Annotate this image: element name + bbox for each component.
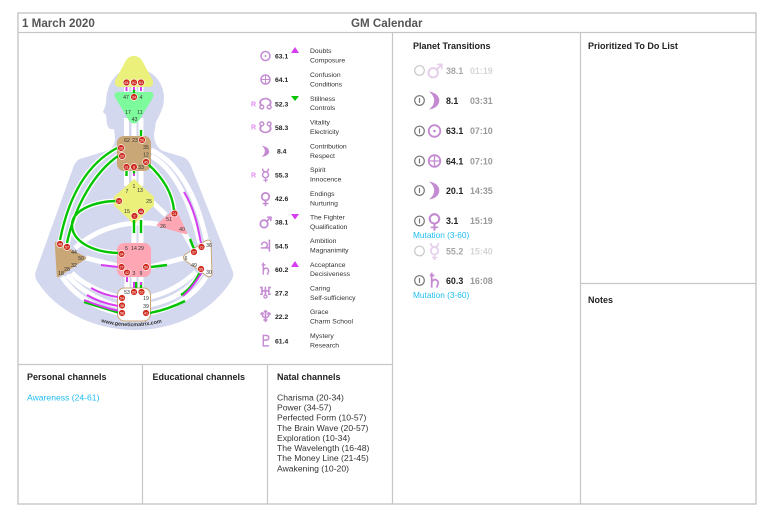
active magenta channels — [84, 87, 202, 310]
natal channels panel: The Money Line (21-45) — [277, 453, 369, 463]
url arc guide — [101, 321, 167, 326]
personal channels panel — [27, 372, 107, 402]
gate numbers: 19 — [143, 296, 149, 302]
row 22.2: 22.2 — [275, 314, 288, 321]
transition 8.1 — [415, 92, 493, 109]
planet activations list — [251, 47, 356, 350]
gate numbers: 30 — [206, 270, 212, 276]
active gate numbers: 10 — [117, 199, 121, 203]
row 27.2: ♅ — [258, 284, 273, 302]
transition 38.1: ♂ — [426, 59, 444, 83]
row 27.2 — [258, 284, 356, 302]
row 55.3: Innocence — [310, 176, 342, 184]
row 52.3: ☊ — [258, 94, 273, 114]
transition 55.2: ☿ — [428, 239, 441, 263]
white channels — [60, 87, 207, 313]
transition 63.1: 63.1 — [446, 126, 463, 136]
transition 60.3 — [413, 268, 493, 300]
natal channels panel: Awakening (10-20) — [277, 464, 349, 474]
gate numbers: 3 — [133, 271, 136, 277]
row 22.2: Charm School — [310, 318, 354, 326]
row 8.4: Contribution — [310, 144, 347, 150]
row 61.4: ♇ — [259, 332, 273, 350]
active gate numbers: 41 — [144, 311, 148, 315]
row 38.1: Qualification — [310, 224, 348, 231]
spleen center — [56, 243, 85, 276]
gate numbers: 17 — [125, 110, 131, 116]
gate numbers: 62 — [124, 138, 130, 144]
gate numbers: 49 — [191, 263, 197, 269]
active gate numbers: 58 — [120, 311, 124, 315]
row 8.4: Respect — [310, 153, 335, 160]
transition 38.1: 01:19 — [470, 66, 493, 76]
row 63.1: 63.1 — [275, 54, 288, 60]
transition 64.1 — [415, 155, 493, 167]
active gate numbers: 54 — [120, 296, 124, 300]
gate numbers: 26 — [160, 224, 166, 230]
gate numbers: 43 — [132, 117, 137, 123]
transition 3.1: 15:19 — [470, 216, 493, 226]
website url: www.geneticmatrix.com — [102, 319, 162, 326]
throat center — [117, 136, 151, 171]
gate numbers: 18 — [58, 271, 64, 277]
natal channels panel: Power (34-57) — [277, 402, 332, 412]
gate numbers: 9 — [140, 271, 143, 277]
planet transitions panel — [413, 41, 493, 300]
row 58.3 — [251, 118, 340, 137]
row 38.1 — [258, 213, 348, 232]
active gate numbers: 59 — [144, 265, 148, 269]
row 27.2: 27.2 — [275, 290, 288, 298]
active gate numbers: 24 — [132, 95, 136, 99]
active gate numbers: 42 — [125, 271, 129, 275]
gate numbers: 5 — [125, 246, 128, 252]
natal channels panel: The Wavelength (16-48) — [277, 443, 369, 453]
natal channels panel: The Brain Wave (20-57) — [277, 423, 369, 433]
solar plexus center — [183, 240, 212, 277]
row 54.5: Ambition — [310, 238, 337, 245]
active gate numbers: 45 — [144, 160, 148, 164]
natal channels panel: Exploration (10-34) — [277, 433, 350, 443]
body graph chart — [35, 56, 234, 330]
header: 1 March 2020 — [22, 17, 95, 30]
gate numbers: 4 — [140, 95, 143, 101]
row 60.2 — [258, 260, 351, 278]
transition 20.1 — [415, 182, 493, 199]
transition 3.1 — [413, 209, 493, 240]
transition 64.1: 07:10 — [470, 156, 493, 166]
row 63.1: Composure — [310, 58, 345, 64]
active gate numbers: 27 — [120, 265, 124, 269]
row 27.2: Caring — [310, 286, 330, 292]
to do heading: Prioritized To Do List — [588, 41, 678, 51]
transition 55.2: 15:40 — [470, 246, 493, 256]
row 60.2: Acceptance — [310, 262, 346, 269]
educational channels panel: Educational channels — [152, 372, 245, 382]
row 42.6: 42.6 — [275, 196, 288, 203]
silhouette — [35, 68, 233, 330]
row 64.1 — [261, 72, 343, 88]
row 58.3: 58.3 — [275, 125, 288, 132]
personal channels panel: Personal channels — [27, 372, 107, 382]
transition 38.1: 38.1 — [446, 66, 463, 76]
g center — [115, 180, 153, 223]
transitions heading: Planet Transitions — [413, 41, 491, 51]
notes heading: Notes — [588, 295, 613, 305]
active gate numbers: 37 — [192, 250, 196, 254]
row 61.4: Mystery — [310, 333, 334, 340]
row 38.1: ♂ — [258, 213, 273, 232]
active gate numbers: 52 — [140, 290, 144, 294]
row 52.3 — [251, 94, 336, 114]
transition 8.1: 8.1 — [446, 96, 458, 106]
gate numbers: 1 — [133, 184, 136, 190]
gate numbers — [58, 95, 212, 310]
row 38.1: 38.1 — [275, 220, 288, 226]
gate numbers: 11 — [137, 110, 143, 116]
header: GM Calendar — [351, 17, 423, 30]
active gate numbers: 61 — [132, 81, 136, 85]
row 52.3: Stillness — [310, 96, 336, 103]
gate numbers: 39 — [143, 304, 149, 310]
transition 55.2 — [415, 239, 493, 263]
header — [22, 17, 423, 30]
transition 60.3: 60.3 — [446, 276, 463, 286]
active gate numbers: 60 — [132, 290, 136, 294]
transition 3.1: 3.1 — [446, 216, 458, 226]
row 42.6: Nurturing — [310, 200, 338, 208]
row 58.3: ☋ — [258, 118, 273, 137]
transition 20.1: 20.1 — [446, 186, 463, 196]
gate numbers: 51 — [166, 217, 172, 223]
row 54.5: Magnanimity — [310, 248, 349, 254]
gate numbers: 6 — [185, 256, 188, 262]
sacral center — [117, 243, 151, 277]
row 61.4: 61.4 — [275, 338, 288, 346]
row 55.3 — [251, 166, 342, 184]
active gate numbers: 57 — [65, 245, 69, 249]
row 54.5: 54.5 — [275, 244, 288, 250]
gate numbers: 29 — [138, 246, 144, 252]
active gate numbers: 34 — [120, 252, 124, 256]
transition 63.1: 07:10 — [470, 126, 493, 136]
row 52.3: Controls — [310, 105, 336, 112]
active gate numbers: 55 — [199, 267, 203, 271]
gate numbers: 50 — [78, 256, 84, 262]
row 22.2: Grace — [310, 309, 329, 316]
active gate numbers: 20 — [120, 154, 124, 158]
gate numbers: 14 — [131, 246, 137, 252]
row 55.3: 55.3 — [275, 172, 288, 180]
transition 8.1: 03:31 — [470, 96, 493, 106]
transition 3.1: Mutation (3-60) — [413, 230, 469, 240]
active gate numbers: 38 — [120, 304, 124, 308]
transition 55.2: 55.2 — [446, 246, 463, 256]
gate numbers: 32 — [71, 263, 77, 269]
row 8.4: 8.4 — [277, 148, 287, 156]
gate numbers: 44 — [71, 250, 77, 256]
row 55.3: Spirit — [310, 167, 326, 174]
gate numbers: 40 — [179, 227, 185, 233]
active gates — [57, 79, 205, 316]
transition 64.1: 64.1 — [446, 156, 463, 166]
gate numbers: 13 — [137, 188, 143, 194]
heart center — [158, 210, 186, 233]
row 42.6: ♀ — [260, 189, 271, 208]
active gate numbers: 64 — [124, 81, 128, 85]
personal channels panel: Awareness (24-61) — [27, 392, 100, 402]
row 64.1: Confusion — [310, 72, 341, 79]
row 64.1: 64.1 — [275, 77, 288, 84]
row 58.3: R — [251, 124, 256, 132]
row 22.2: ♆ — [258, 307, 273, 326]
row 64.1: Conditions — [310, 82, 343, 88]
natal channels panel — [277, 372, 369, 474]
row 58.3: Vitality — [310, 120, 330, 126]
natal channels panel: Charisma (20-34) — [277, 392, 344, 402]
row 60.2: Decisiveness — [310, 271, 351, 278]
transition 20.1: 14:35 — [470, 186, 493, 196]
row 61.4: Research — [310, 342, 339, 350]
active gate numbers: 63 — [139, 81, 143, 85]
row 42.6: Endings — [310, 191, 335, 198]
row 63.1: Doubts — [310, 48, 332, 55]
row 27.2: Self-sufficiency — [310, 295, 356, 302]
row 60.2: 60.2 — [275, 267, 288, 274]
gate numbers: 12 — [143, 152, 149, 158]
ajna center — [115, 92, 153, 124]
transition 60.3: ♄ — [426, 268, 443, 292]
row 55.3: R — [251, 172, 256, 180]
row 55.3: ☿ — [261, 166, 270, 184]
gate numbers: 35 — [143, 145, 149, 151]
gate numbers: 53 — [124, 290, 130, 296]
transition 63.1 — [415, 125, 493, 137]
row 38.1: The Fighter — [310, 214, 345, 222]
transition 60.3: Mutation (3-60) — [413, 290, 469, 300]
transition 3.1: ♀ — [427, 209, 442, 233]
active gate numbers — [58, 81, 204, 315]
row 54.5 — [258, 236, 349, 256]
gate numbers: 7 — [126, 189, 129, 195]
row 58.3: Electricity — [310, 129, 340, 136]
row 22.2 — [258, 307, 354, 326]
active gate numbers: 56 — [140, 138, 144, 142]
active gate numbers: 48 — [58, 242, 62, 246]
row 60.2: ♄ — [258, 260, 273, 278]
row 42.6 — [260, 189, 338, 208]
transition 60.3: 16:08 — [470, 276, 493, 286]
active gate numbers: 16 — [119, 146, 123, 150]
active gate numbers: 8 — [133, 165, 135, 169]
row 61.4 — [259, 332, 339, 350]
row 8.4 — [262, 144, 347, 160]
active gate numbers: 31 — [124, 165, 128, 169]
gate numbers: 15 — [124, 209, 130, 215]
gate numbers: 36 — [206, 243, 212, 249]
active green channels — [60, 90, 200, 313]
gate numbers: 33 — [138, 165, 144, 171]
row 63.1 — [261, 47, 345, 64]
active gate numbers: 2 — [134, 214, 136, 218]
gate numbers: 25 — [146, 199, 152, 205]
gate numbers: 47 — [123, 95, 129, 101]
active gate numbers: 46 — [139, 210, 143, 214]
active gate numbers: 22 — [200, 245, 204, 249]
row 52.3: R — [251, 102, 256, 108]
transition 38.1 — [415, 59, 493, 83]
row 54.5: ♃ — [258, 236, 273, 256]
gate numbers: 23 — [132, 138, 138, 144]
natal channels panel: Perfected Form (10-57) — [277, 412, 366, 422]
row 52.3: 52.3 — [275, 102, 288, 108]
root center — [118, 288, 150, 321]
head center — [115, 56, 153, 87]
active gate numbers: 21 — [172, 212, 176, 216]
gate numbers: 28 — [64, 267, 70, 273]
natal channels panel: Natal channels — [277, 372, 341, 382]
